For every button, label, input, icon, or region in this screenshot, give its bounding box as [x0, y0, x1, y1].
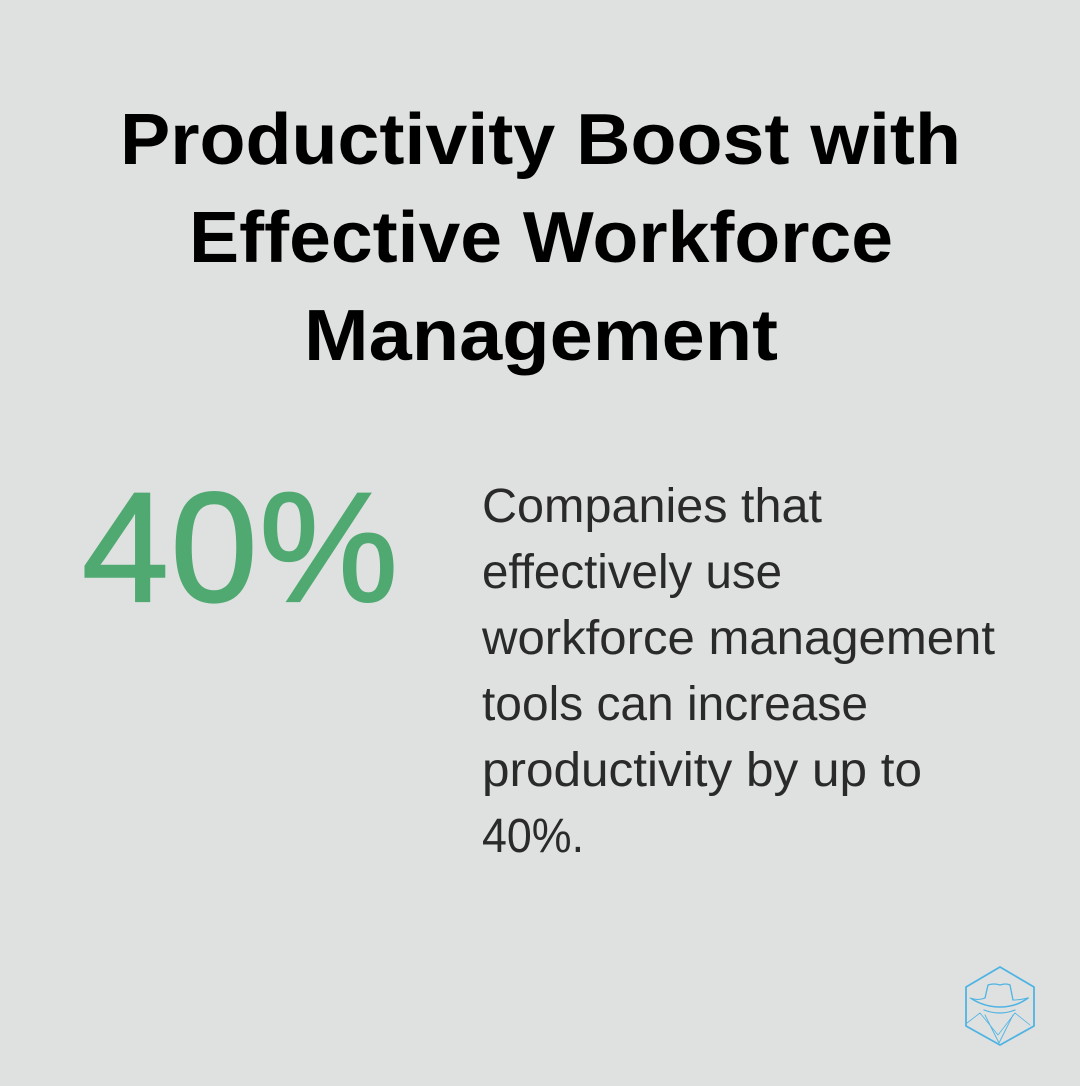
icon: hexagon logo with hat and coat: [966, 967, 1034, 1045]
description text: tools can increase: [482, 678, 868, 731]
big stat: 40%: 40%: [82, 461, 398, 635]
title: Productivity Boost with: [120, 100, 961, 180]
description text: [481, 480, 995, 863]
description text: effectively use: [482, 546, 782, 599]
description text: 40%.: [482, 810, 584, 863]
description text: workforce management: [481, 612, 995, 665]
title: [120, 100, 961, 376]
title: Management: [304, 296, 778, 376]
title: Effective Workforce: [189, 198, 893, 278]
description text: Companies that: [482, 480, 822, 533]
description text: productivity by up to: [482, 744, 922, 797]
